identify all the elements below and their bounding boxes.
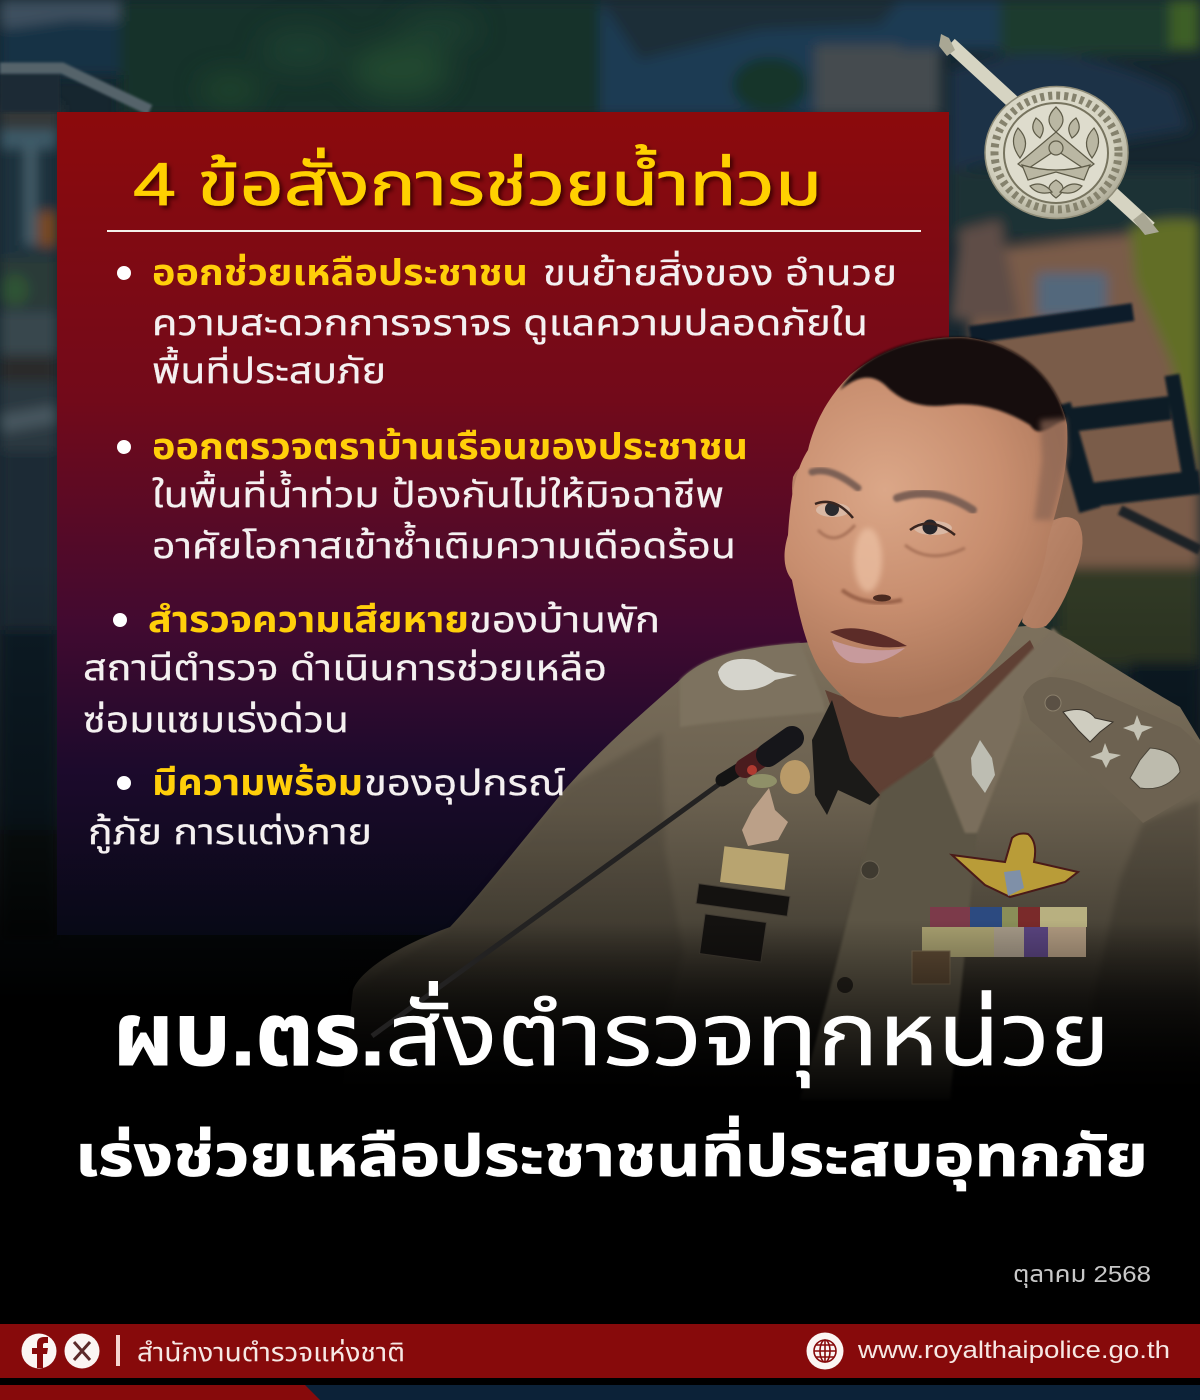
background fade [0, 560, 1200, 1400]
headline [113, 981, 1110, 1088]
shoulder board [1023, 677, 1200, 823]
item 3: damage survey: ของบ้านพัก [469, 599, 660, 640]
divider [116, 1335, 120, 1366]
subheadline: เร่งช่วยเหลือประชาชนที่ประสบอุทกภัย [75, 1115, 1148, 1191]
uniform torso and arms [340, 625, 1200, 1110]
right ear [1022, 517, 1083, 628]
microphone [372, 738, 792, 1036]
panel: red gradient content panel [57, 112, 949, 935]
icon: X [64, 1334, 100, 1368]
collar inner dark [812, 700, 880, 815]
item 1: assistance: ความสะดวกการจราจร ดูแลความปลอดภัยใน [152, 302, 868, 344]
item 4: readiness: กู้ภัย การแต่งกาย [88, 811, 372, 853]
item 4: readiness: ของอุปกรณ์ [364, 762, 566, 804]
title underline [107, 230, 921, 232]
icon: facebook [22, 1334, 56, 1368]
date: ตุลาคม 2568 [1013, 1261, 1151, 1288]
shaved side of head [1034, 418, 1068, 520]
item 2: patrol: ในพื้นที่น้ำท่วม ป้องกันไม่ให้มิจฉาชีพ [152, 470, 724, 515]
photo: police commander in uniform [340, 337, 1200, 1110]
item 3: damage survey: ซ่อมแซมเร่งด่วน [83, 699, 349, 740]
headline: ผบ.ตร. [113, 985, 385, 1084]
item 3: damage survey: สถานีตำรวจ ดำเนินการช่วยเหลือ [83, 647, 607, 688]
headline: สั่งตำรวจทุกหน่วย [385, 981, 1110, 1088]
icon: globe [806, 1332, 844, 1370]
left ear [792, 467, 808, 520]
footer website: www.royalthaipolice.go.th [857, 1337, 1170, 1364]
footer agency name: สำนักงานตำรวจแห่งชาติ [137, 1337, 405, 1367]
item 2: patrol [117, 426, 748, 566]
item 3: damage survey [83, 599, 660, 740]
emblem: silver police insignia [939, 34, 1159, 235]
item 3: damage survey: สำรวจความเสียหาย [148, 599, 469, 640]
shirt placket [800, 755, 977, 1100]
badges and medals [696, 659, 1180, 993]
hair [840, 337, 1066, 431]
item 1: assistance: พื้นที่ประสบภัย [152, 346, 386, 391]
item 1: assistance: ออกช่วยเหลือประชาชน [152, 252, 528, 293]
face [785, 337, 1067, 717]
neck [825, 640, 1040, 800]
sleeve shading [340, 733, 683, 1100]
right sleeve shading [1093, 800, 1200, 1100]
item 1: assistance: ขนย้ายสิ่งของ อำนวย [543, 250, 897, 293]
item 2: patrol: อาศัยโอกาสเข้าซ้ำเติมความเดือดร้อน [152, 521, 736, 566]
uniform lower fade [340, 920, 1200, 1110]
collar left [680, 643, 825, 727]
collar right [933, 628, 1075, 833]
soft tree highlights [200, 14, 480, 106]
heading: panel title: 4 ข้อสั่งการช่วยน้ำท่วม [133, 144, 822, 218]
item 4: readiness [88, 762, 566, 853]
footer bottom strip [0, 1385, 1200, 1400]
item 1: assistance [117, 250, 897, 391]
item 4: readiness: มีความพร้อม [152, 762, 363, 803]
footer band [0, 1324, 1200, 1400]
facial features [812, 471, 973, 663]
item 2: patrol: ออกตรวจตราบ้านเรือนของประชาชน [152, 426, 748, 467]
